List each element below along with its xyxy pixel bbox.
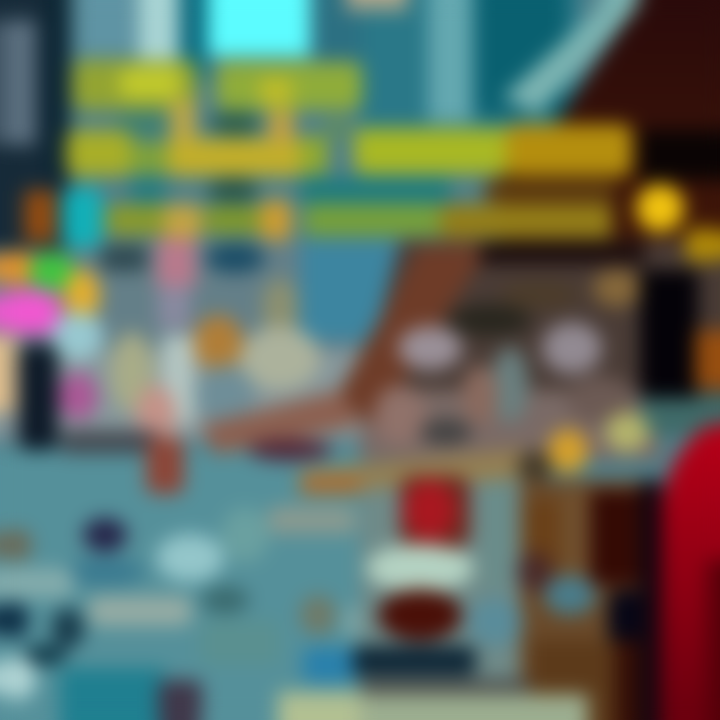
- counter band and lamps: [300, 412, 649, 494]
- red figure: [660, 422, 720, 720]
- brown cabinet: [467, 480, 662, 720]
- title line 1: [72, 60, 362, 140]
- central cup and red object: [303, 476, 530, 694]
- middle band of figures: [60, 238, 320, 494]
- diagonal brown beam: [200, 245, 490, 461]
- top structure columns: [0, 0, 644, 250]
- lower left items: [0, 506, 588, 720]
- left blocks and umbrella: [0, 188, 104, 450]
- yellow lights: [593, 184, 720, 307]
- title line 2: [66, 124, 632, 204]
- title line 3: [106, 100, 612, 240]
- right crowd: [374, 130, 720, 445]
